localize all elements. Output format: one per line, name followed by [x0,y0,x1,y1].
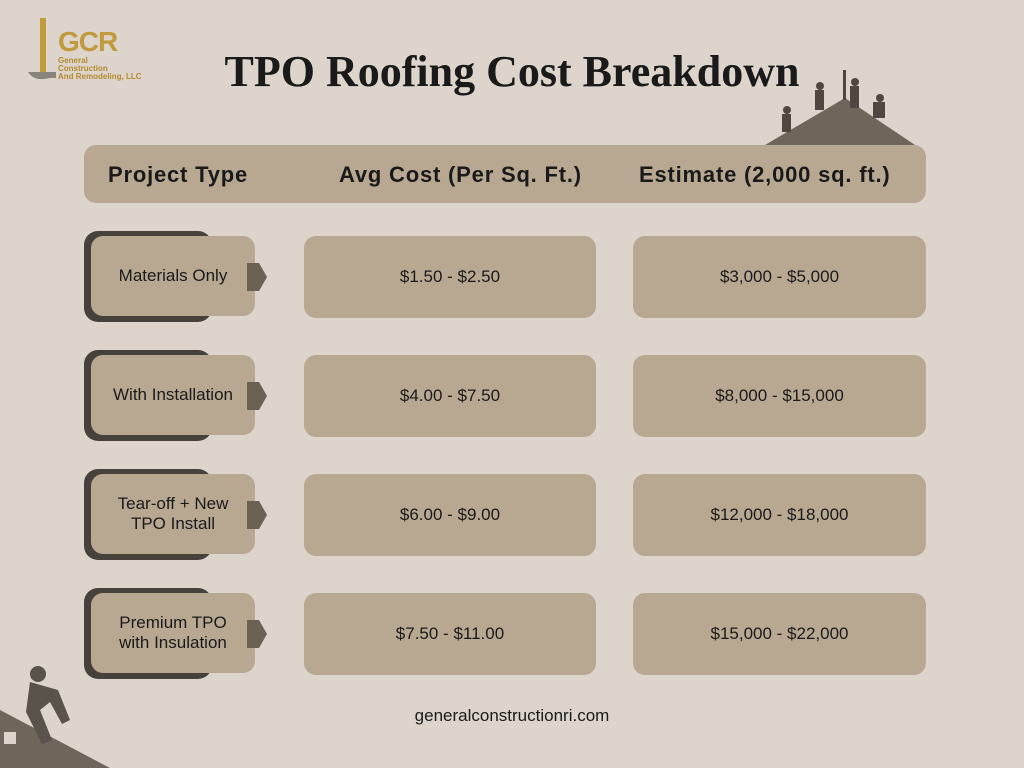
row 3: $6.00 - $9.00 [400,505,500,524]
row 1 [84,231,926,322]
row 1: Materials Only [119,266,227,285]
row 2: With Installation [113,385,233,404]
row 4 [84,588,926,679]
logo: GCR [58,26,117,57]
row 2: $4.00 - $7.50 [400,386,500,405]
footer url: generalconstructionri.com [415,706,609,725]
header bar: Project Type [108,162,248,187]
row 2: $8,000 - $15,000 [715,386,844,405]
title: TPO Roofing Cost Breakdown [225,47,799,96]
header bar: Estimate (2,000 sq. ft.) [639,162,890,187]
row 2 [84,350,926,441]
logo: General [58,56,88,65]
row 4: $7.50 - $11.00 [396,624,504,643]
icon: roofers silhouette [765,70,915,145]
row 4: $15,000 - $22,000 [710,624,848,643]
row 1: $3,000 - $5,000 [720,267,839,286]
row 3: $12,000 - $18,000 [710,505,848,524]
row 4: Premium TPO [119,613,227,632]
icon: hammer [28,18,56,80]
icon: roofer bottom-left [0,666,110,768]
row 1: $1.50 - $2.50 [400,267,500,286]
header bar: Avg Cost (Per Sq. Ft.) [339,162,582,187]
row 3: TPO Install [131,514,215,533]
row 3: Tear-off + New [118,494,228,513]
row 4: with Insulation [119,633,227,652]
logo: Construction [58,64,108,73]
header bar [84,145,926,203]
row 3 [84,469,926,560]
logo: And Remodeling, LLC [58,72,142,81]
logo [28,18,142,81]
